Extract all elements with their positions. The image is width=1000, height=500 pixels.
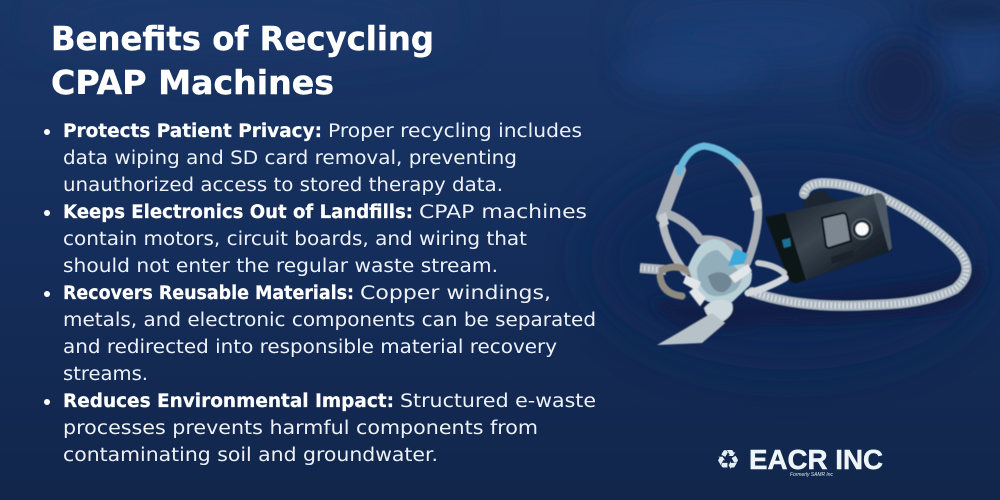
tagline: Formerly SAMR Inc	[790, 472, 833, 478]
benefit: recovers reusable materials: streams.	[63, 364, 148, 385]
benefit: keeps electronics out of landfills: should not enter the regular waste stream.	[63, 256, 498, 277]
machine	[765, 190, 892, 283]
benefit: recovers reusable materials: Copper windings,	[360, 283, 551, 304]
illustration: CPAP machine with mask and hose	[640, 146, 985, 345]
benefit: keeps electronics out of landfills: Keeps Electronics Out of Landfills:	[63, 202, 413, 223]
company name: EACR INC	[749, 444, 883, 475]
benefit: recovers reusable materials: and redirected into responsible material recovery	[63, 337, 557, 358]
benefit: protects patient privacy: Protects Patient Privacy:	[63, 121, 322, 142]
benefit: protects patient privacy: unauthorized access to stored therapy data.	[63, 175, 503, 196]
power button	[852, 219, 872, 239]
mask	[657, 239, 752, 345]
benefit: reduces environmental impact	[44, 391, 596, 466]
benefit: keeps electronics out of landfills: CPAP machines	[419, 202, 587, 223]
hose	[640, 183, 966, 306]
benefit: keeps electronics out of landfills: contain motors, circuit boards, and wiring that	[63, 229, 527, 250]
benefit: protects patient privacy	[44, 121, 582, 196]
bullet list	[44, 121, 596, 466]
benefit: reduces environmental impact: Structured e-waste	[400, 391, 596, 412]
screen	[822, 213, 851, 248]
title	[51, 19, 434, 102]
benefit: protects patient privacy: data wiping and SD card removal, preventing	[63, 148, 517, 169]
benefit: recovers reusable materials: metals, and electronic components can be separated	[63, 310, 596, 331]
shadow	[650, 265, 985, 331]
logo	[716, 444, 883, 478]
headgear	[658, 146, 785, 296]
benefit: protects patient privacy: Proper recycling includes	[328, 121, 582, 142]
benefit: recovers reusable materials	[44, 283, 596, 385]
title: CPAP Machines	[51, 63, 334, 102]
benefit: keeps electronics out of landfills	[44, 202, 587, 277]
benefit: recovers reusable materials: Recovers Reusable Materials:	[63, 283, 354, 304]
benefit: reduces environmental impact: Reduces Environmental Impact:	[63, 391, 394, 412]
benefit: reduces environmental impact: processes prevents harmful components from	[63, 418, 538, 439]
benefit: reduces environmental impact: contaminating soil and groundwater.	[63, 445, 438, 466]
title: Benefits of Recycling	[51, 19, 434, 58]
icon: recycling symbol: ♻	[716, 445, 740, 476]
